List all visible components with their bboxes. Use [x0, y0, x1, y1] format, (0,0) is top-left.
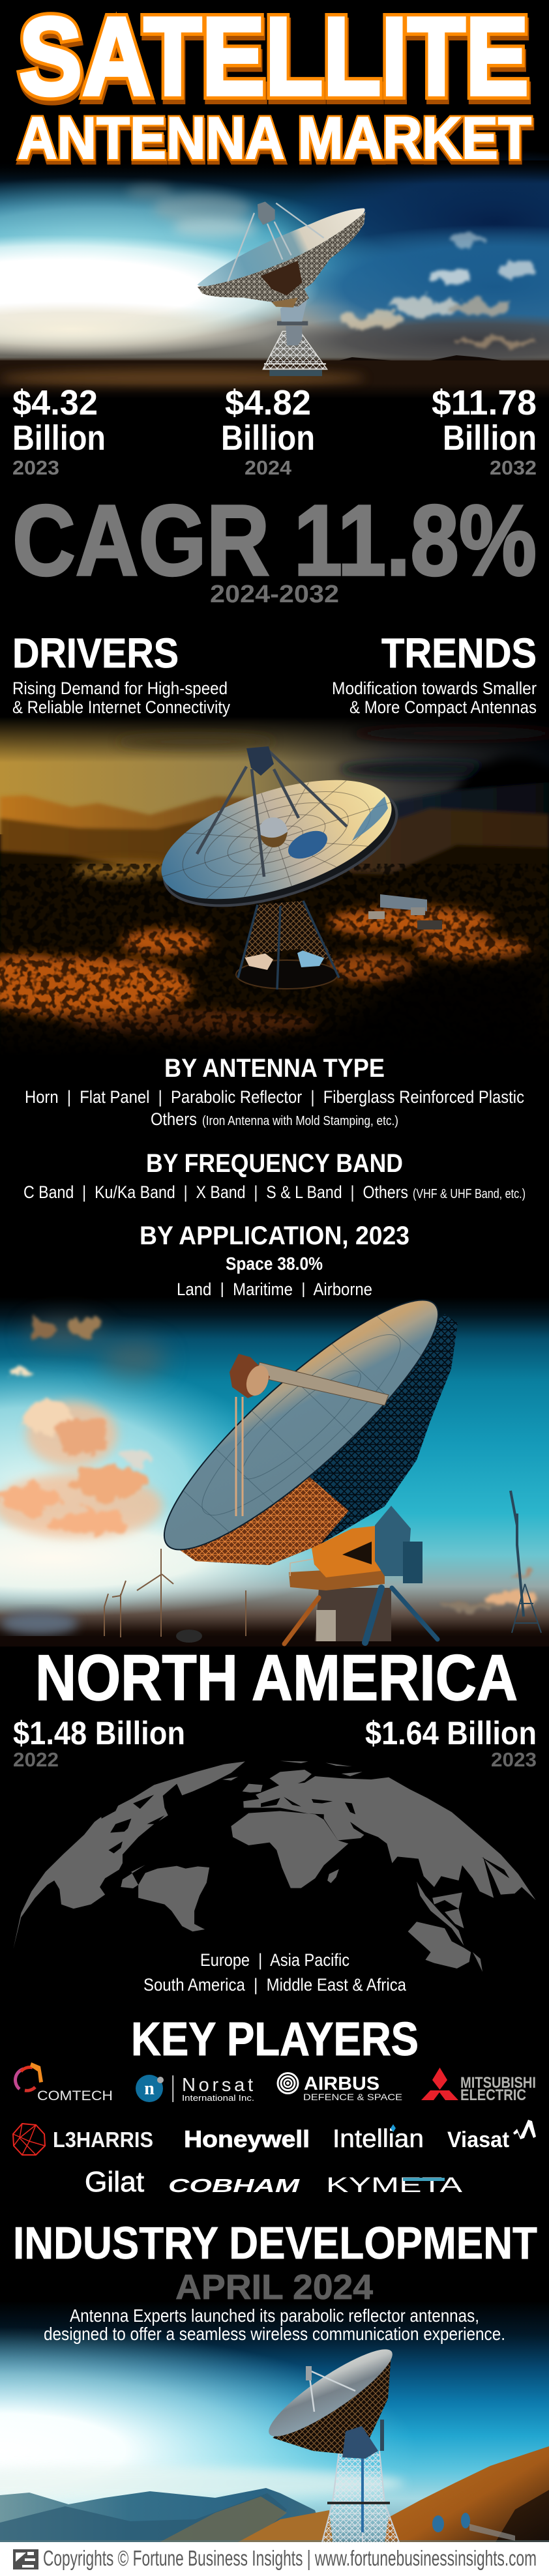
tower	[322, 2451, 399, 2542]
segment: frequency band: BY FREQUENCY BAND	[146, 1149, 403, 1178]
drivers: & Reliable Internet Connectivity	[12, 697, 230, 717]
pedestal	[315, 1588, 391, 1641]
footer	[0, 2542, 549, 2576]
feed arm	[308, 2370, 355, 2412]
segment: application	[140, 1222, 409, 1299]
logo: norsat: International Inc.	[182, 2093, 254, 2103]
stat 2023: 2023	[12, 456, 59, 479]
segment: application: Land | Maritime | Airborne	[177, 1280, 372, 1299]
logo: l3harris	[13, 2124, 153, 2155]
feed struts	[228, 203, 324, 282]
dish truss	[273, 2354, 391, 2454]
drivers: DRIVERS	[12, 630, 179, 677]
market size statistics	[12, 383, 537, 479]
logo: comtech: COMTECH	[37, 2088, 113, 2103]
stat 2024: 2024	[245, 456, 292, 479]
other regions: Europe | Asia Pacific	[200, 1950, 349, 1970]
logo: honeywell: Honeywell	[184, 2126, 310, 2152]
logo: mitsubishi electric: ELECTRIC	[460, 2086, 526, 2104]
north america 2023 value	[365, 1715, 537, 1771]
drivers: Rising Demand for High-speed	[12, 679, 228, 698]
mount	[312, 1525, 381, 1577]
truss	[171, 1314, 458, 1565]
logo: norsat	[136, 2075, 254, 2103]
north america 2022 value: $1.48 Billion	[13, 1715, 185, 1751]
hero image: radio telescope against blue sky	[0, 150, 549, 399]
logo: airbus: DEFENCE & SPACE	[303, 2092, 402, 2102]
other regions	[143, 1950, 407, 1995]
drivers	[12, 630, 230, 717]
other regions: South America | Middle East & Africa	[143, 1975, 407, 1995]
segment: frequency band	[23, 1149, 526, 1202]
ground	[0, 360, 549, 398]
feed arm	[256, 1362, 389, 1405]
logo: comtech	[15, 2062, 113, 2103]
tower lattice	[243, 901, 334, 961]
logo: viasat: Viasat	[447, 2128, 509, 2152]
stat 2024: $4.82	[225, 383, 311, 422]
logo: mitsubishi electric: MITSUBISHI	[460, 2074, 536, 2092]
lattice tower	[263, 331, 327, 370]
north america 2022 value	[13, 1715, 185, 1771]
logo: kymeta	[326, 2173, 463, 2197]
hero image: large dish with wind turbines	[0, 1272, 549, 1647]
date: APRIL 2024	[175, 2268, 373, 2307]
logo: l3harris: L3HARRIS	[53, 2128, 153, 2152]
platform	[289, 1567, 385, 1590]
small dishes	[432, 2515, 444, 2532]
dish face	[198, 208, 365, 286]
legs	[284, 1588, 438, 1644]
hero image: dish over mountains at sunset	[0, 717, 549, 1083]
dish face	[138, 1272, 465, 1578]
stat 2024: Billion	[221, 418, 315, 458]
right mast	[511, 1491, 541, 1633]
buildings	[368, 894, 442, 929]
dish face	[147, 756, 406, 923]
title	[18, 0, 532, 175]
hub	[259, 817, 288, 846]
wind turbines	[104, 1549, 246, 1637]
logo: norsat: Norsat	[182, 2075, 253, 2096]
segment: frequency band: (VHF & UHF Band, etc.)	[413, 1187, 526, 1201]
logo: mitsubishi electric	[421, 2068, 536, 2104]
ground patches	[0, 862, 531, 1036]
globe map	[13, 1761, 536, 1972]
segment: antenna type: (Iron Antenna with Mold Stamping, etc.)	[202, 1114, 398, 1128]
hero image: antenna on mountain	[0, 2301, 549, 2575]
telescope structure	[198, 201, 366, 376]
development description	[44, 2305, 505, 2344]
stat 2032: 2032	[490, 456, 537, 479]
stat 2023: $4.32	[12, 383, 98, 422]
clouds	[127, 184, 258, 237]
dish rim	[150, 761, 411, 930]
stat 2032: Billion	[443, 418, 537, 458]
segment: frequency band: C Band | Ku/Ka Band | X Band | S & L Band | Others	[23, 1182, 408, 1202]
clouds	[26, 1319, 166, 1379]
segment: antenna type: BY ANTENNA TYPE	[164, 1054, 385, 1083]
tower base	[236, 960, 338, 989]
icon: fortune business insights mark	[13, 2549, 38, 2569]
stat 2023	[12, 383, 106, 479]
stat 2024	[221, 383, 315, 479]
mountains	[0, 782, 549, 1056]
north america 2022 value: 2022	[13, 1748, 59, 1771]
key players heading: KEY PLAYERS	[131, 2013, 419, 2066]
segment: antenna type: Others	[151, 1109, 197, 1129]
segment: application: Space 38.0%	[226, 1253, 323, 1274]
truss	[198, 212, 366, 307]
stat 2032	[432, 383, 537, 479]
trends: TRENDS	[381, 630, 537, 677]
mountains	[0, 2488, 326, 2542]
segment: application: BY APPLICATION, 2023	[140, 1222, 409, 1250]
horizon	[0, 1636, 549, 1647]
neck	[286, 326, 302, 345]
logo: gilat: Gilat	[85, 2166, 144, 2198]
dish face	[260, 2337, 401, 2448]
stat 2023: Billion	[12, 418, 106, 458]
logo: intellian: Intellian	[333, 2125, 424, 2153]
CAGR period: 2024-2032	[210, 581, 339, 608]
segment: antenna type	[25, 1054, 524, 1129]
logo: airbus	[276, 2072, 402, 2102]
logo: norsat: n	[144, 2079, 155, 2099]
logo: cobham: COBHAM	[168, 2176, 300, 2197]
small mast	[380, 2420, 384, 2451]
stat 2032: $11.78	[432, 383, 537, 422]
logo: kymeta: KYMETA	[326, 2173, 463, 2197]
trends	[332, 630, 537, 717]
north america 2023 value: 2023	[491, 1748, 537, 1771]
feed struts	[197, 750, 347, 877]
development description: Antenna Experts launched its parabolic reflector antennas,	[70, 2305, 479, 2326]
logo: airbus: AIRBUS	[304, 2073, 379, 2094]
logo: viasat	[447, 2120, 536, 2152]
